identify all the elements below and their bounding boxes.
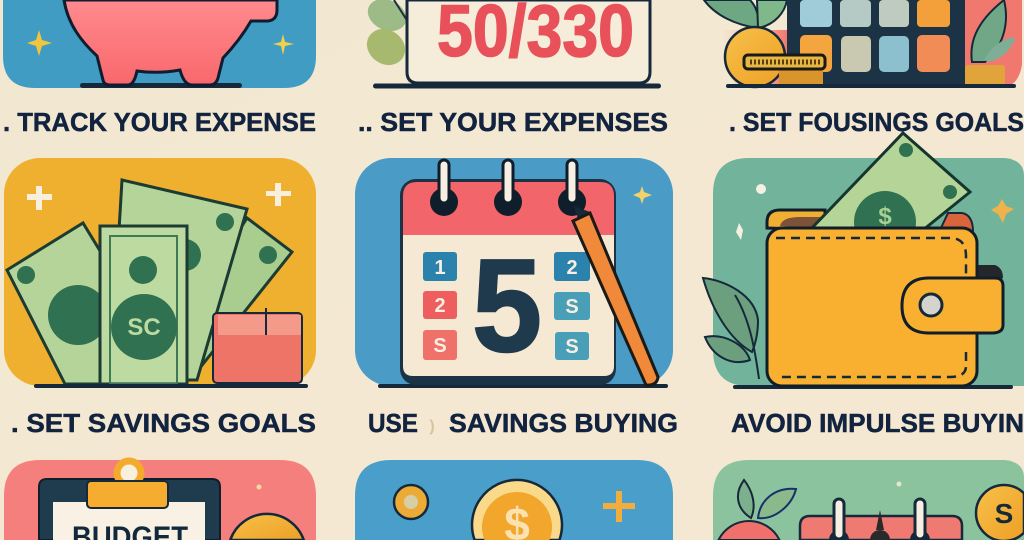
icon: leaves	[360, 0, 412, 72]
icon: sparkle left	[27, 30, 52, 56]
base line	[34, 384, 308, 388]
base line	[733, 385, 1013, 389]
panel: calendar	[355, 158, 673, 388]
card	[407, 0, 650, 83]
day tiles: 2	[566, 257, 578, 279]
day tiles: S	[433, 335, 447, 357]
panel: budget clipboard	[4, 460, 316, 540]
panel background: green	[713, 460, 1024, 540]
icon: plant	[703, 278, 759, 379]
icon: back bill	[110, 180, 247, 380]
icon: large coin	[472, 480, 562, 540]
icon: sparkle	[896, 482, 902, 486]
icon: sparkle	[633, 186, 652, 204]
icon: coin: S	[995, 498, 1013, 529]
day tiles: 1	[434, 257, 446, 279]
base line	[378, 384, 668, 388]
icon: pencil	[573, 206, 658, 385]
icon: wallet body	[767, 228, 1003, 386]
label: avoid impulse buying: AVOID IMPULSE BUYIN	[731, 408, 1024, 438]
day tiles: 2	[434, 295, 446, 317]
icon: calendar	[400, 160, 616, 385]
panel background: blue	[355, 460, 673, 540]
label: use savings buying: SAVINGS BUYING	[449, 408, 678, 438]
icon: sparkle	[256, 484, 262, 490]
icon: calculator	[787, 0, 965, 87]
label: use savings buying: USE	[368, 408, 418, 438]
binder rings	[430, 160, 586, 216]
base line	[373, 84, 661, 88]
label: use savings buying: )	[429, 418, 435, 435]
icon: sparkles	[27, 183, 291, 210]
icon: left leaves	[704, 0, 787, 28]
panel: coins	[355, 460, 673, 540]
icon: small coin	[394, 485, 428, 519]
icon: coin	[976, 485, 1024, 540]
label: set your expenses: .. SET YOUR EXPENSES	[358, 107, 668, 137]
panel background: blue	[355, 158, 673, 386]
panel background: orange	[4, 158, 316, 386]
icon: apple	[718, 480, 796, 540]
icon: right stack	[965, 65, 1005, 85]
label: set savings goals: . SET SAVINGS GOALS	[11, 408, 316, 438]
icon: gift box	[213, 308, 302, 383]
day tiles	[423, 252, 590, 360]
icon: coin and stack	[725, 27, 825, 87]
icon: plus	[603, 491, 635, 522]
icon: front bill: SC	[127, 314, 161, 341]
panel: 50/30/20 card	[360, 0, 661, 88]
icon: banknote	[811, 131, 972, 226]
panel: piggy bank	[3, 0, 316, 88]
panel background: coral	[4, 460, 316, 540]
icon: front bill	[100, 226, 187, 384]
day tiles: S	[565, 296, 579, 318]
label: track your expense: . TRACK YOUR EXPENSE	[3, 107, 316, 137]
wallet clasp	[902, 278, 1003, 333]
panel background: green	[713, 158, 1024, 386]
icon: sparkles	[736, 184, 1014, 240]
icon: coin	[230, 514, 304, 540]
panel: cash savings	[4, 158, 316, 388]
icon: clipboard	[39, 461, 220, 540]
base line	[726, 84, 1016, 88]
icon: right bill	[170, 218, 292, 374]
panel background: blue	[3, 0, 316, 88]
ground shadow	[80, 83, 242, 88]
big number: 5	[472, 232, 542, 379]
panel: wallet	[703, 133, 1024, 389]
day tiles: S	[565, 336, 579, 358]
icon: left bill	[7, 223, 130, 384]
icon: piggy bank	[64, 0, 277, 85]
icon: banknote: $	[878, 203, 892, 230]
icon: right leaf	[971, 0, 1015, 62]
icon: calendar	[800, 499, 962, 540]
panel background: coral	[722, 30, 787, 86]
icon: wallet back	[767, 210, 825, 230]
panel: calendar and apple	[713, 460, 1024, 540]
icon: sparkle right	[273, 34, 294, 55]
panel: calculator	[704, 0, 1022, 88]
